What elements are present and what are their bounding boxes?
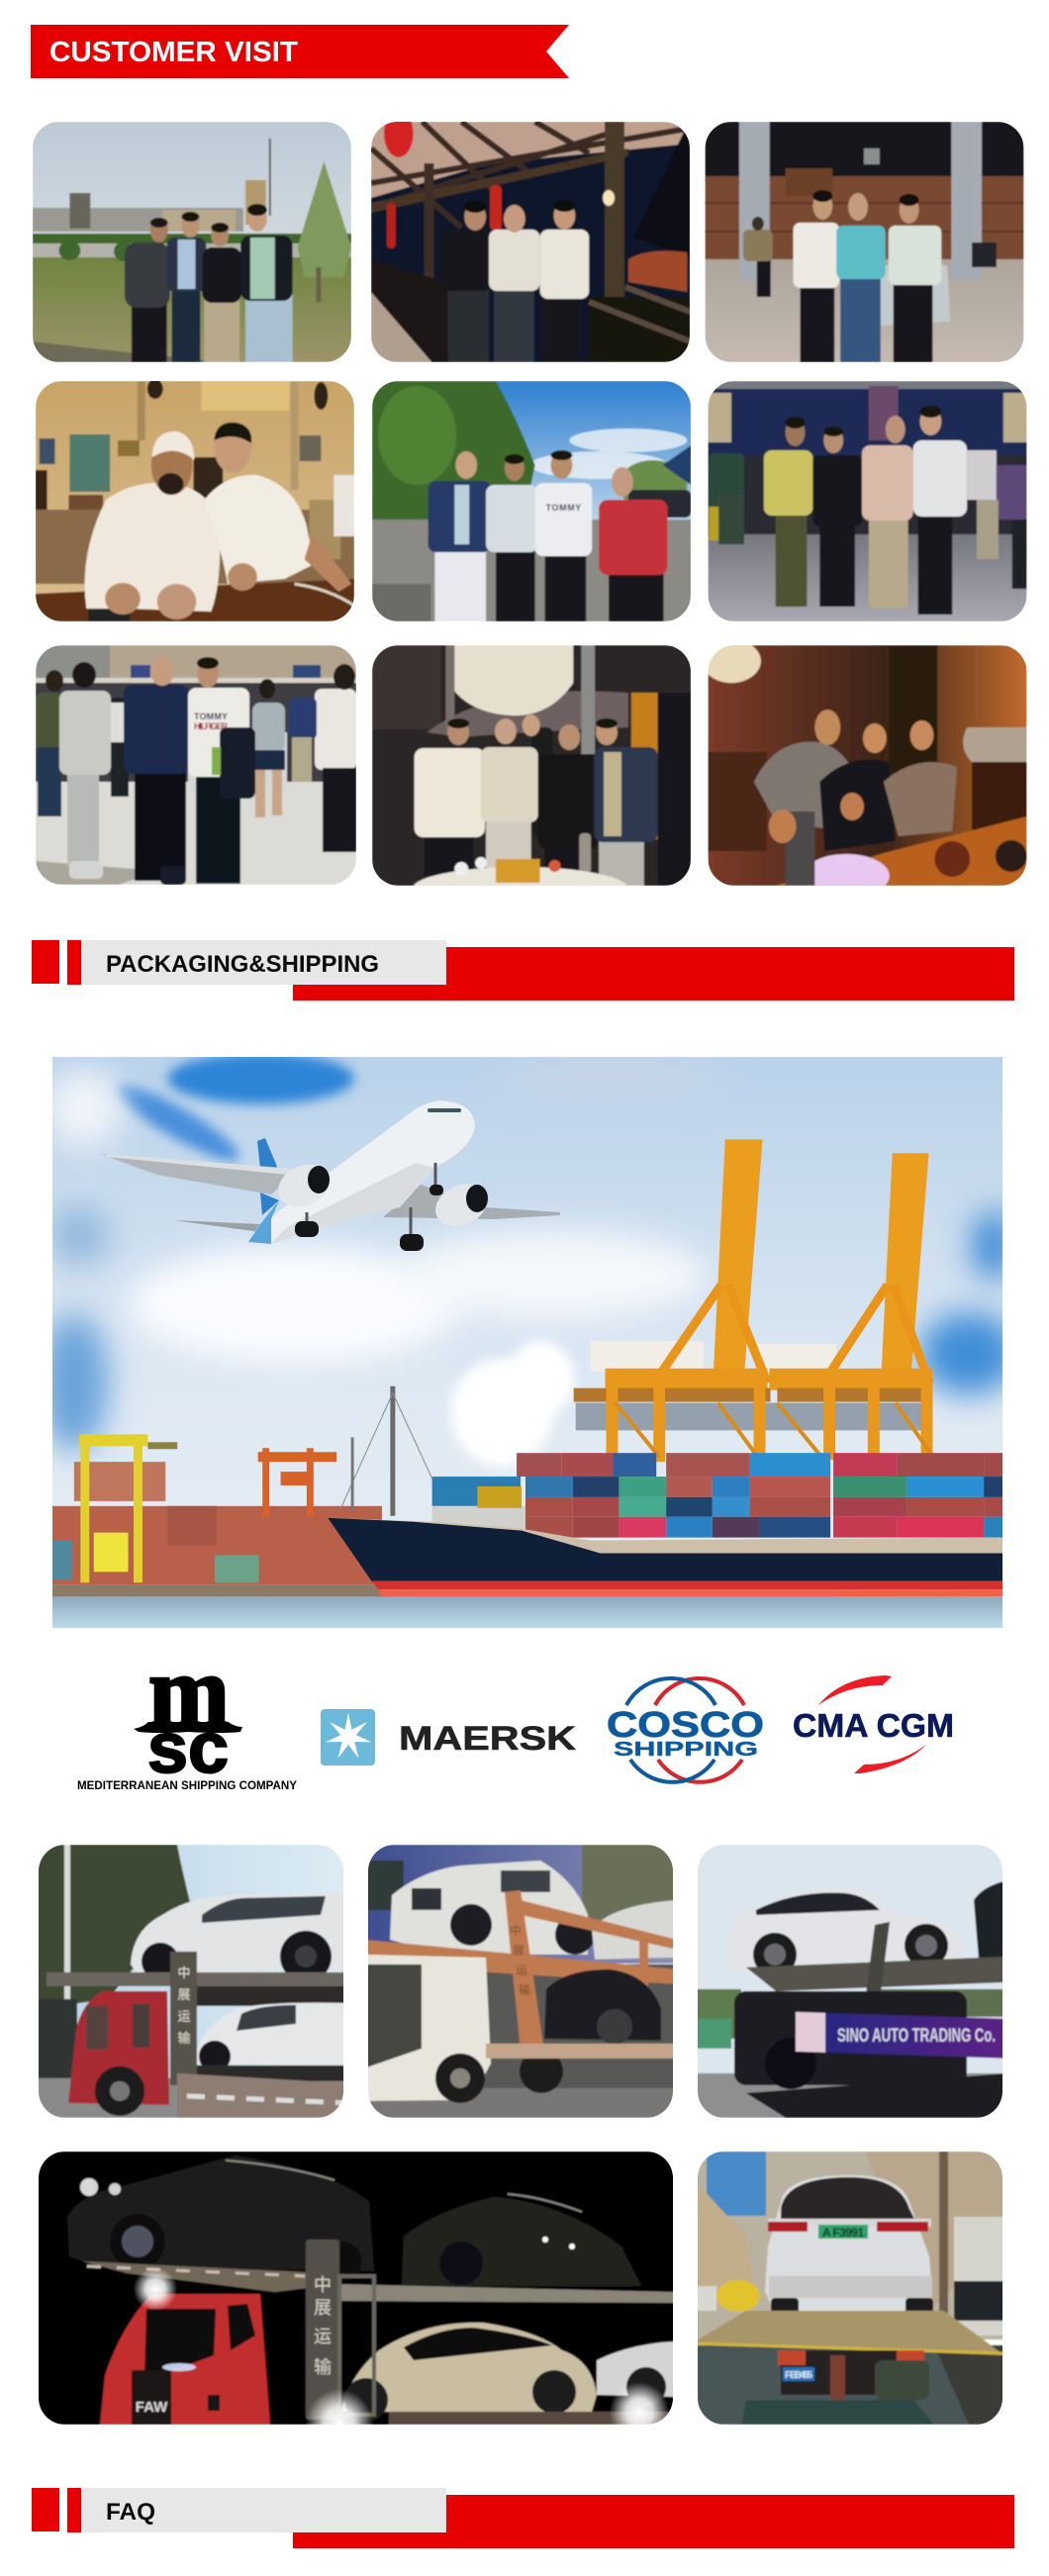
carrier tower with lettering: 运 [177,2009,191,2024]
flatbed and chassis: F EB455 [785,2370,812,2381]
stacked containers on ship [432,1453,1002,1538]
photo: car carrier at night [37,2151,675,2456]
photo: four men at auto show [708,381,1027,621]
carrier tower with lettering: 中 [314,2275,332,2295]
lettering on frame: 中 [510,1923,522,1938]
photo: three men on terrace at night [371,110,690,362]
section heading: packaging and shipping [32,940,1014,1001]
red truck cab [100,2294,270,2425]
person: man in grey suit [59,662,111,879]
logo: COSCO Shipping [607,1678,764,1782]
person: man in white robe [85,431,221,620]
photo: four men by road under blue sky [372,381,691,621]
carrier tower with lettering: 输 [177,2031,191,2046]
people: three men [440,200,589,362]
lettering on frame: 展 [513,1944,524,1957]
lower dark car [544,1969,661,2045]
orange gantry cranes [574,1139,930,1462]
people: three men with car [794,190,941,362]
lettering on frame: 运 [516,1963,527,1977]
people: five men [415,715,658,886]
person: man in white logo tee: TOMMY [194,712,228,721]
photo: group of four outdoors on grass [33,122,351,362]
red truck cab: FAW [136,2399,168,2416]
container ship hull [328,1518,1002,1597]
white SUV rear view: A F3991 [822,2226,864,2240]
carrier tower with lettering: 运 [314,2327,332,2346]
person: man in navy polo [124,656,189,885]
person: man in white polo [204,422,351,592]
photo: two men at crowded auto expo [36,645,356,885]
airplane [98,1100,560,1251]
logo: Maersk [321,1709,577,1765]
top white car [727,1888,964,1976]
logo: COSCO Shipping: COSCO [607,1704,764,1745]
top white car [129,1892,343,1973]
top white cars [390,1860,677,1959]
lower black car [734,1991,967,2089]
carrier tower with lettering: 输 [314,2357,332,2377]
photo: white truck carrying white cars at dusk [364,1845,677,2118]
logo: CMA CGM: CMA CGM [793,1707,954,1744]
photo: five men at banquet table [372,645,691,910]
photo: red car carrier truck by day [38,1845,346,2118]
lower cream car [341,2323,597,2422]
lettering on frame [510,1923,530,1997]
section heading: FAQ: FAQ [106,2499,155,2526]
white SUV rear view [765,2175,933,2320]
section heading: packaging and shipping: PACKAGING&SHIPPING [106,951,379,978]
sky with clouds [52,1057,1002,1540]
port scene [40,1053,1018,1628]
carrier tower with lettering: 展 [177,1987,191,2002]
people: four men [125,204,293,362]
logo: COSCO Shipping: SHIPPING [614,1739,758,1761]
white truck cab [364,1955,563,2103]
logo: CMA CGM [793,1675,954,1773]
people: three men [754,710,957,886]
photo: three men in warmly lit restaurant [702,639,1027,898]
photo: two men at restaurant table [36,379,354,621]
sea water [52,1596,1002,1628]
heading banner: customer visit: CUSTOMER VISIT [49,37,298,68]
people: four men [429,450,668,621]
banner [796,2012,1008,2058]
heading banner: customer visit [31,25,569,78]
carrier tower with lettering [306,2240,339,2420]
people: four men [764,406,967,615]
people: crowd in background [36,664,356,852]
carrier tower with lettering: 展 [314,2298,332,2318]
photo: Sino Auto Trading carrier truck [692,1845,1008,2118]
logo: MSC: m [148,1634,230,1750]
photo: three men in car showroom [705,122,1024,362]
carrier tower with lettering: 中 [177,1965,191,1980]
upper dark cars [67,2155,641,2286]
lower white car [194,2003,346,2072]
people: four men: TOMMY [546,503,581,513]
carrier tower with lettering [170,1952,197,2085]
white SUV at right [597,2341,675,2407]
logo: MSC: MEDITERRANEAN SHIPPING COMPANY [77,1780,297,1792]
red truck cab [68,1991,169,2116]
photo: white SUV on flatbed tow truck [692,2151,1008,2425]
upper deck [82,2261,675,2303]
person: man in white logo tee [188,657,255,884]
person: walking visitor [743,217,773,297]
logo: Maersk: MAERSK [399,1720,577,1758]
photo: plane over container port [40,1053,1018,1628]
person: man in white logo tee: HILFIGER [194,721,228,731]
orange carrier frame [364,1890,677,2051]
flatbed and chassis [692,2311,1004,2425]
banquet table [412,831,627,886]
logo: MSC [77,1634,297,1792]
lettering on frame: 输 [519,1982,530,1997]
section heading: FAQ [32,2488,1014,2548]
logo: MSC: sc [147,1709,229,1788]
headlight glares [134,2267,669,2456]
shipping line logos [77,1634,954,1792]
left terminal with containers [52,1386,438,1598]
